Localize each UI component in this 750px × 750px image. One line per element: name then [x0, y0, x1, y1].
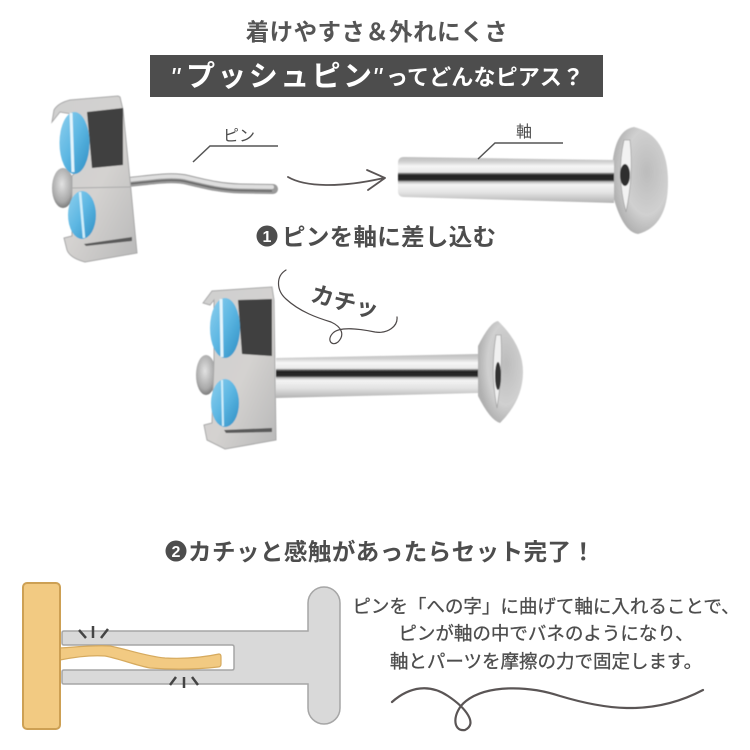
explanation text [352, 596, 740, 672]
pin [128, 176, 273, 191]
step 2 heading: 2 [172, 544, 181, 561]
heading banner: " [372, 62, 383, 93]
blue stone bottom [68, 191, 96, 239]
heading banner: ってどんなピアス？ [386, 65, 584, 90]
pin label [193, 128, 278, 162]
kachi text: カチッ [308, 280, 381, 323]
arrow [288, 170, 385, 190]
step 2 heading: カチッと感触があったらセット完了！ [188, 538, 595, 565]
shaft part [398, 127, 668, 234]
blue stone top [210, 298, 240, 358]
squiggle: click sound [278, 270, 397, 344]
head [478, 321, 523, 423]
shaft [398, 157, 614, 203]
decorative squiggle [392, 688, 703, 730]
assembled earring [196, 287, 523, 449]
step 1 heading: ピンを軸に差し込む [282, 224, 496, 250]
metal setting [52, 96, 137, 262]
shaft label [478, 123, 563, 159]
explanation text: 軸とパーツを摩擦の力で固定します。 [390, 651, 702, 672]
explanation text: ピンが軸の中でバネのようになり、 [398, 623, 694, 644]
heading banner: プッシュピン [186, 60, 372, 93]
shaft label: 軸 [516, 123, 532, 141]
step 1 heading: 1 [263, 229, 272, 246]
explanation text: ピンを「への字」に曲げて軸に入れることで、 [352, 596, 740, 617]
dark panel [87, 108, 123, 168]
ball [52, 168, 74, 208]
diagram: cross-section [23, 583, 340, 729]
heading banner: " [170, 62, 181, 93]
title: 着けやすさ＆外れにくさ [246, 19, 508, 45]
part section [23, 583, 60, 729]
ball [196, 355, 216, 395]
blue stone top [60, 112, 90, 174]
shaft [276, 354, 478, 398]
head [612, 127, 668, 234]
pin label: ピン [223, 128, 255, 145]
seam [72, 187, 130, 188]
dark panel [238, 299, 272, 356]
shaft section [62, 587, 340, 724]
heading banner [150, 55, 603, 97]
contact marks bottom [170, 677, 198, 688]
contact marks top [79, 626, 108, 638]
metal setting [203, 287, 276, 449]
earring with pin (separated) [52, 96, 273, 262]
pin section [60, 646, 221, 669]
blue stone bottom [211, 379, 239, 427]
